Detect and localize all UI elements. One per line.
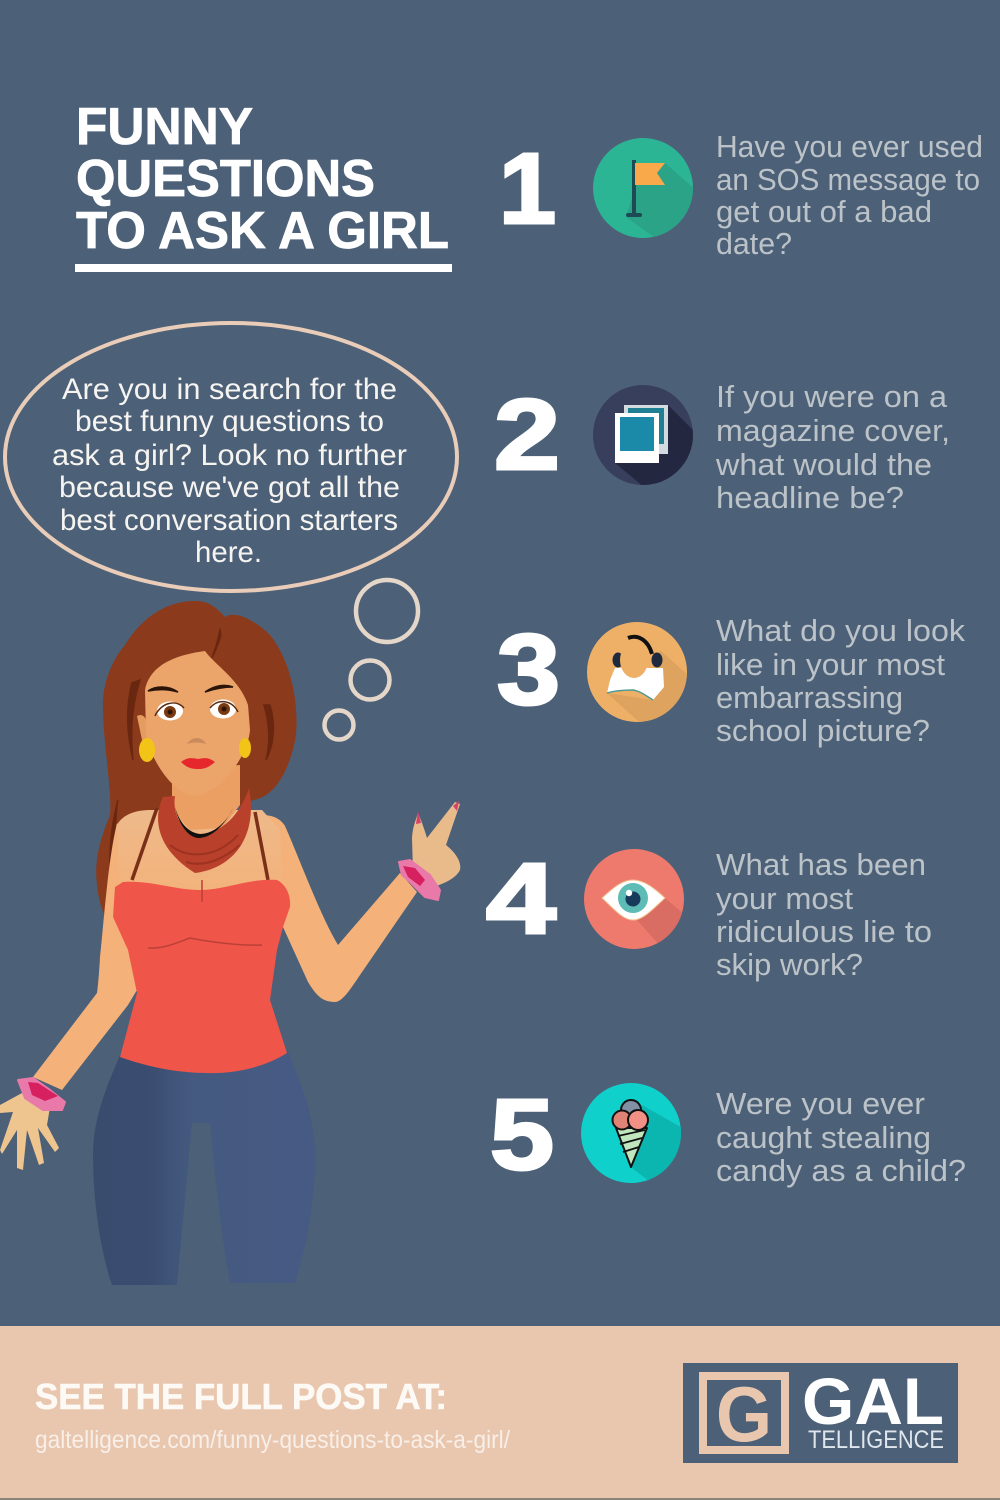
scarf folds [170, 835, 240, 864]
neck [172, 765, 240, 830]
eyes [157, 702, 183, 720]
eyebrows [148, 685, 233, 692]
question 3: What do you look [716, 613, 966, 648]
question 2: headline be? [716, 480, 904, 515]
logo: Galtelligence: TELLIGENCE [808, 1426, 944, 1454]
title [75, 98, 452, 272]
question 5: Were you ever [716, 1086, 925, 1121]
question 4: your most [716, 881, 853, 916]
question 2 [715, 379, 950, 515]
number 2: 2 [494, 379, 560, 491]
icon: eye [584, 849, 684, 949]
icon: flag [593, 138, 693, 238]
question 1: get out of a bad [716, 194, 932, 229]
question 1: Have you ever used [716, 129, 983, 164]
speech bubble: intro text: here. [195, 536, 262, 569]
left hand [0, 1093, 59, 1170]
question 1: an SOS message to [716, 162, 980, 197]
speech bubble: intro text: Are you in search for the [62, 373, 397, 406]
face [145, 651, 250, 796]
question 3: school picture? [716, 713, 930, 748]
question 4: skip work? [716, 947, 863, 982]
right hand [412, 802, 460, 888]
chest [117, 810, 283, 900]
question 5 [716, 1086, 966, 1188]
question 3: embarrassing [716, 680, 903, 715]
question 1 [716, 129, 983, 261]
question 2: If you were on a [716, 379, 948, 414]
right arm [262, 815, 417, 1002]
left scrunchie [18, 1078, 65, 1110]
footer band [0, 1326, 1000, 1500]
hair strands [110, 630, 273, 890]
number 3: 3 [497, 614, 560, 726]
question 4: What has been [716, 847, 926, 882]
footer url: galtelligence.com/funny-questions-to-ask-a-girl/ [35, 1426, 510, 1454]
ear [137, 715, 148, 745]
right scrunchie [399, 860, 440, 900]
left arm [33, 823, 137, 1090]
question 2: magazine cover, [716, 413, 950, 448]
footer heading: SEE THE FULL POST AT: [35, 1376, 447, 1417]
speech bubble: intro text: ask a girl? Look no further [52, 439, 407, 472]
icon: ice cream cone [581, 1083, 681, 1183]
number 1: 1 [499, 133, 556, 245]
question 3 [716, 613, 966, 748]
earrings [139, 738, 155, 762]
title: TO ASK A GIRL [76, 202, 449, 260]
illustration: woman pointing [0, 601, 460, 1285]
scarf [158, 788, 251, 873]
top [113, 880, 290, 1073]
logo: Galtelligence [683, 1363, 958, 1463]
question 1: date? [716, 226, 792, 261]
number 5: 5 [490, 1079, 554, 1191]
mouth [181, 758, 215, 769]
title: QUESTIONS [76, 150, 375, 208]
question 4 [716, 847, 932, 982]
hair [96, 601, 297, 925]
jeans [93, 1050, 315, 1285]
icon: photos [593, 385, 693, 485]
thought bubbles [324, 580, 418, 740]
question 2: what would the [715, 447, 932, 482]
logo: Galtelligence: GAL [802, 1364, 944, 1438]
question 5: caught stealing [716, 1120, 931, 1155]
top seam [148, 880, 262, 948]
title: FUNNY [76, 98, 253, 156]
nose [187, 738, 206, 744]
speech bubble: intro text: because we've got all the [59, 471, 400, 504]
question 3: like in your most [716, 647, 945, 682]
number 4: 4 [486, 843, 556, 955]
straps [132, 808, 268, 880]
logo: Galtelligence: G [716, 1370, 772, 1458]
speech bubble: intro text: best funny questions to [75, 405, 384, 438]
speech bubble: intro text: best conversation starters [60, 504, 398, 537]
speech bubble: intro text [5, 323, 457, 591]
question 5: candy as a child? [716, 1153, 966, 1188]
icon: headphones and book [587, 622, 687, 722]
question 4: ridiculous lie to [716, 914, 932, 949]
